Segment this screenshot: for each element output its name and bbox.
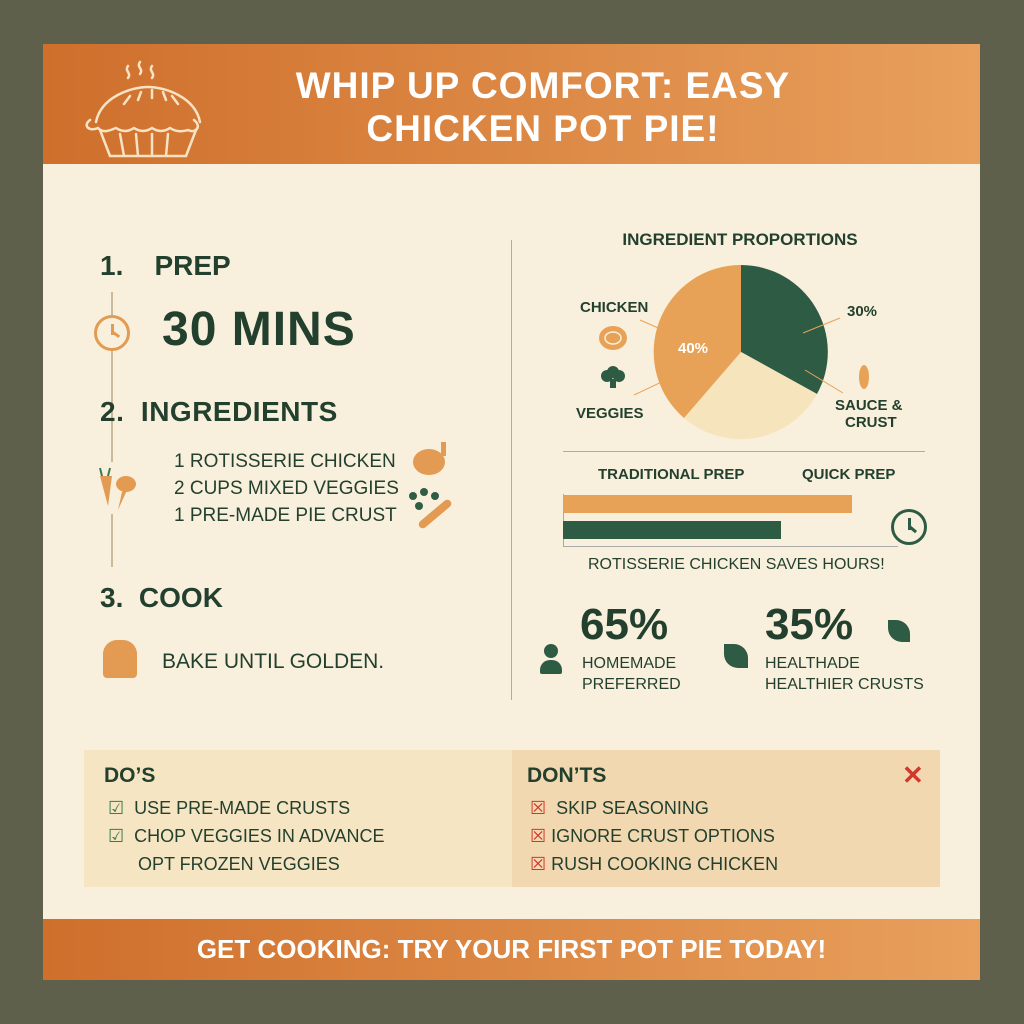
- step 2 ingredients: 2. INGREDIENTS: [100, 396, 338, 427]
- ingredient list: 1 ROTISSERIE CHICKEN: [174, 451, 396, 472]
- panel: dos: ☑ CHOP VEGGIES IN ADVANCE: [108, 826, 385, 846]
- icon: clock: [94, 315, 130, 351]
- pie chart: 30%: [847, 303, 877, 320]
- panel: donts: ☒ RUSH COOKING CHICKEN: [530, 854, 778, 874]
- panel: donts: ☒ SKIP SEASONING: [530, 798, 709, 818]
- bar chart: [563, 466, 927, 573]
- panel: dos: [84, 750, 512, 887]
- stat 35%: [724, 600, 924, 693]
- pie chart: CHICKEN: [580, 299, 648, 316]
- vertical divider: [511, 240, 512, 700]
- step 3 cook: 3. COOK: [100, 582, 223, 613]
- 30 mins: 30 MINS: [162, 303, 356, 356]
- icon: oven mitt: [103, 640, 137, 678]
- panel: donts: ☒ IGNORE CRUST OPTIONS: [530, 826, 775, 846]
- icon: carrots: [99, 462, 136, 514]
- pie chart: CRUST: [845, 414, 897, 431]
- pie chart: SAUCE &: [835, 397, 903, 414]
- bar chart: TRADITIONAL PREP: [598, 466, 744, 483]
- ingredient list: [174, 451, 399, 526]
- stat 65%: PREFERRED: [582, 676, 681, 693]
- footer banner: [43, 919, 980, 980]
- pie chart: VEGGIES: [576, 405, 644, 422]
- icon: pie: [85, 60, 202, 158]
- pie chart: 40%: [678, 340, 708, 357]
- panel: donts: ✕: [902, 760, 924, 790]
- icon: chicken leg & peas: [409, 442, 452, 528]
- step 1 prep: 1. PREP: [100, 250, 231, 281]
- panel: dos: ☑ USE PRE-MADE CRUSTS: [108, 798, 350, 818]
- stat 35%: HEALTHIER CRUSTS: [765, 676, 924, 693]
- panel: dos: OPT FROZEN VEGGIES: [138, 854, 340, 874]
- ingredient list: 1 PRE-MADE PIE CRUST: [174, 505, 397, 526]
- stat 65%: 65%: [580, 600, 668, 649]
- bar chart: QUICK PREP: [802, 466, 895, 483]
- panel: dos: DO’S: [104, 764, 155, 787]
- footer banner: GET COOKING: TRY YOUR FIRST POT PIE TODAY!: [197, 934, 826, 964]
- panel: donts: [512, 750, 940, 887]
- title: CHICKEN POT PIE!: [366, 108, 720, 149]
- divider: [563, 451, 925, 452]
- ingredient list: 2 CUPS MIXED VEGGIES: [174, 478, 399, 499]
- stat 65%: HOMEMADE: [582, 655, 676, 672]
- bake text: BAKE UNTIL GOLDEN.: [162, 650, 384, 673]
- panel: donts: DON’TS: [527, 764, 606, 787]
- title: WHIP UP COMFORT: EASY: [296, 65, 790, 106]
- pie chart: [576, 265, 903, 439]
- title: [296, 65, 790, 149]
- chart heading: INGREDIENT PROPORTIONS: [622, 230, 858, 249]
- timeline line: [111, 292, 113, 567]
- bar chart: ROTISSERIE CHICKEN SAVES HOURS!: [588, 556, 885, 573]
- header banner: [43, 44, 980, 164]
- stat 35%: HEALTHADE: [765, 655, 860, 672]
- stat 65%: [540, 600, 681, 693]
- stat 35%: 35%: [765, 600, 853, 649]
